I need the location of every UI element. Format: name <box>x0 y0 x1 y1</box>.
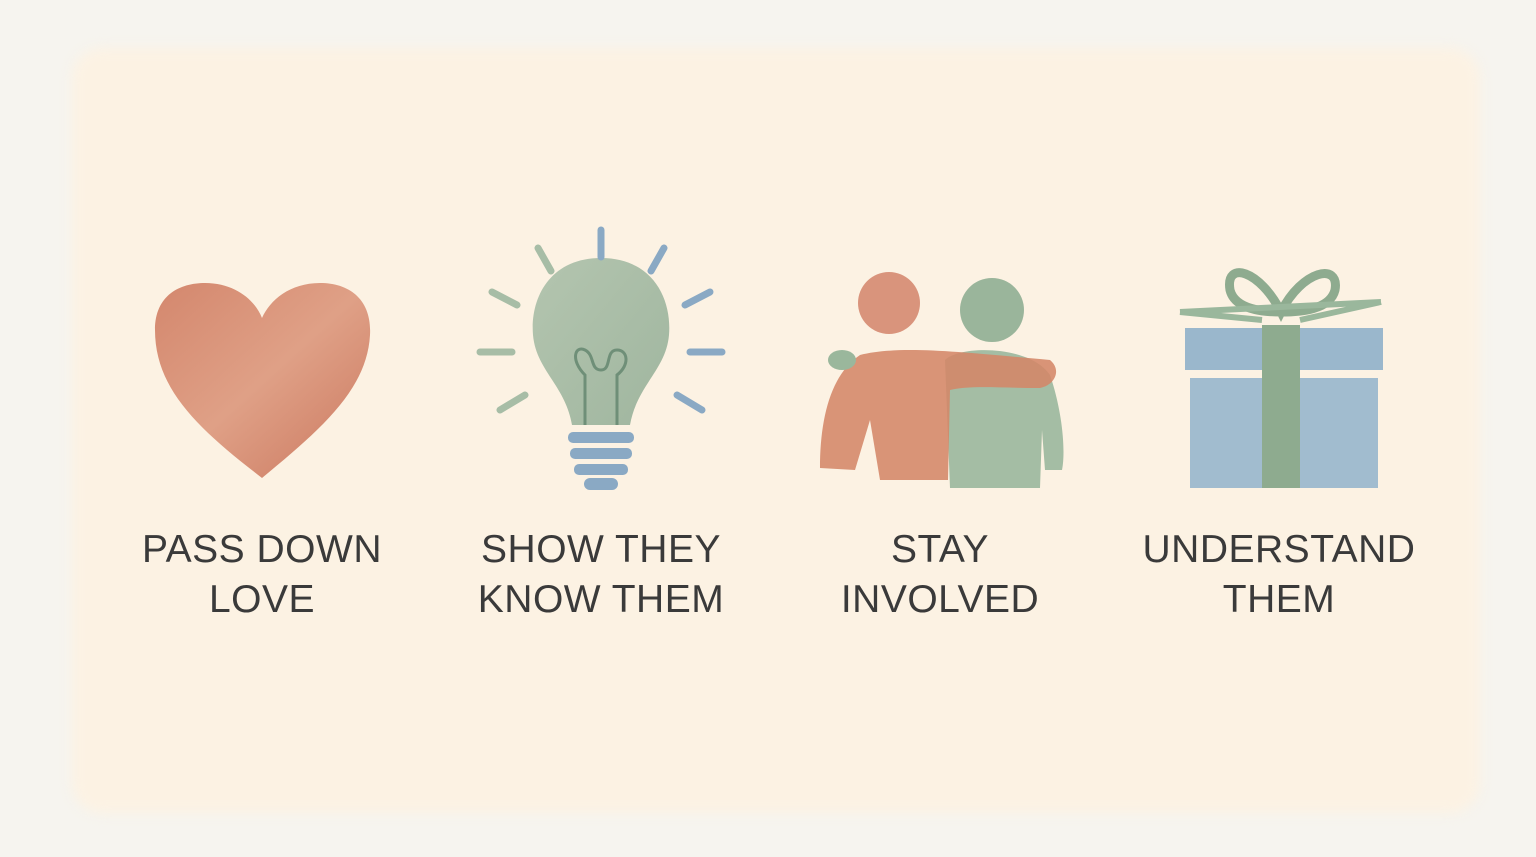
label: pass down love <box>142 528 382 621</box>
icon: heart <box>155 283 370 478</box>
label: show they know them: KNOW THEM <box>478 578 724 621</box>
label: understand them: THEM <box>1223 578 1335 621</box>
label: understand them <box>1143 528 1415 621</box>
icon: two people hugging <box>820 272 1064 488</box>
label: stay involved: INVOLVED <box>841 578 1039 621</box>
label: understand them: UNDERSTAND <box>1143 528 1415 571</box>
icon: gift box <box>1180 273 1383 488</box>
label: pass down love: LOVE <box>209 578 315 621</box>
label: show they know them <box>478 528 724 621</box>
label: stay involved <box>841 528 1039 621</box>
label: stay involved: STAY <box>891 528 989 571</box>
icon: light bulb <box>480 230 722 490</box>
label: pass down love: PASS DOWN <box>142 528 382 571</box>
label: show they know them: SHOW THEY <box>481 528 721 571</box>
